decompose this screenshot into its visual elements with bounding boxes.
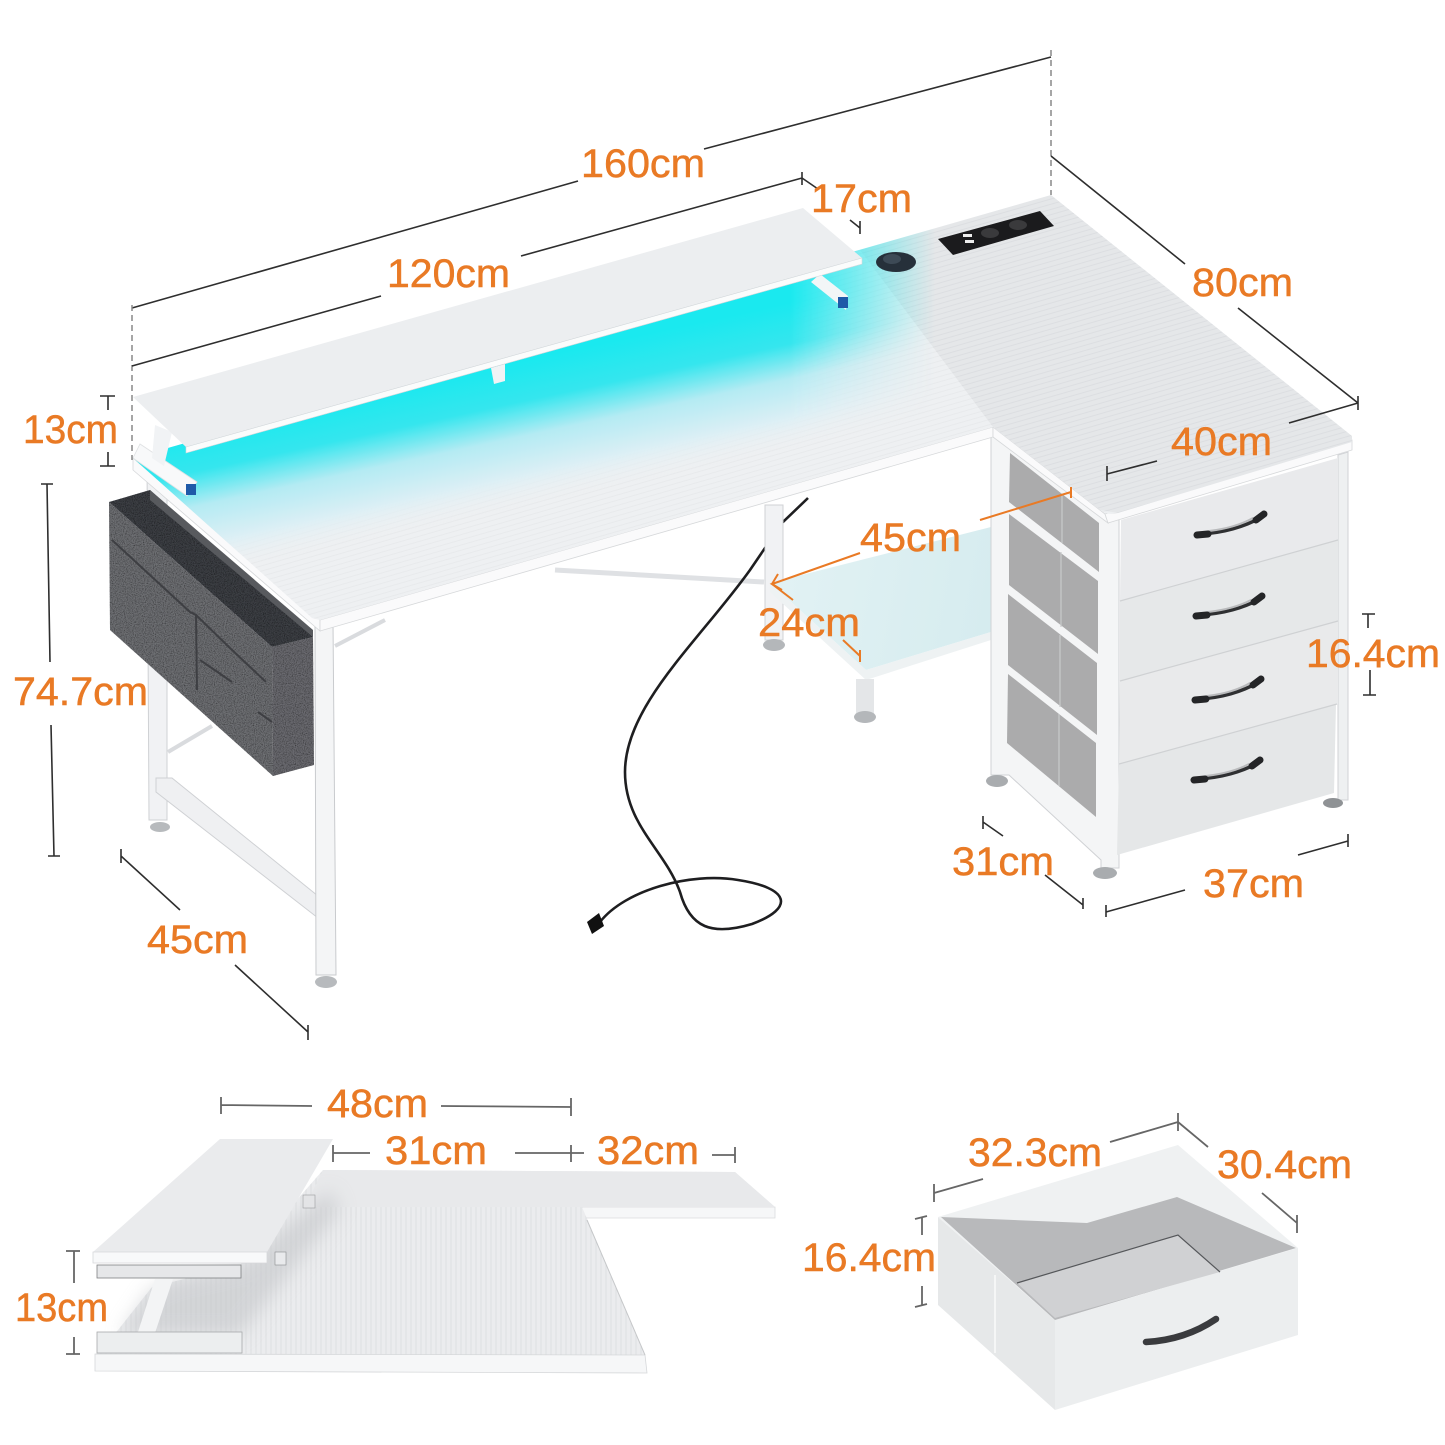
power strip: [938, 211, 1054, 255]
dimension: 31cm: 31cm: [385, 1129, 487, 1173]
dimension: 30.4cm: 30.4cm: [1217, 1143, 1352, 1187]
bag back wall: [150, 490, 313, 637]
dimension: 31cm: [333, 1129, 584, 1173]
dimension: 17cm: [802, 177, 912, 234]
dimension: 37cm cabinet width: [1106, 834, 1348, 917]
power cord with plug: [587, 498, 808, 934]
dimension: 24cm shelf depth: 24cm: [758, 601, 860, 645]
drawer fronts: [1117, 458, 1338, 855]
riser support: [97, 1195, 315, 1353]
dimension: 40cm: 40cm: [1171, 420, 1272, 464]
bag interior: [109, 490, 313, 647]
dimension: 48cm: [221, 1082, 571, 1126]
front edge: [95, 1354, 647, 1373]
inner white wall: [938, 1145, 1298, 1320]
dimension: 160cm: [132, 50, 1051, 460]
dimension: 16.4cm box height: [802, 1216, 936, 1307]
dimension: 120cm: 120cm: [387, 252, 510, 296]
dimension: 32cm: 32cm: [597, 1129, 699, 1173]
riser front edge: [186, 258, 862, 453]
desktop surface: [95, 1170, 775, 1355]
dimension: 74.7cm: 74.7cm: [13, 670, 148, 714]
dimension: 74.7cm: [13, 484, 148, 856]
dimension: 13cm riser height: 13cm: [23, 408, 118, 452]
left side: [938, 1217, 1055, 1410]
front panel: [1055, 1248, 1298, 1410]
storage bag: [109, 490, 314, 776]
desktop: [120, 190, 1360, 640]
dimension: 45cm shelf width: [772, 487, 1071, 590]
dimension: 160cm: 160cm: [581, 142, 705, 186]
riser top: [93, 1139, 333, 1252]
return edge: [582, 1207, 775, 1218]
dimension: 31cm cabinet depth: 31cm: [952, 840, 1054, 884]
inner grey wall: [941, 1197, 1296, 1320]
dimension: 16.4cm drawer height: [1306, 614, 1440, 695]
top view desktop diagram: [93, 1139, 775, 1373]
dimension: 32.3cm: 32.3cm: [968, 1131, 1102, 1175]
riser brackets: [133, 274, 848, 496]
bag side: [272, 637, 314, 776]
fabric side panels: [1007, 453, 1099, 817]
bag pockets: [112, 540, 272, 722]
drawer unit: [986, 431, 1348, 879]
dimension: 16.4cm box height: 16.4cm: [802, 1236, 936, 1280]
dimension: 80cm: 80cm: [1192, 261, 1293, 305]
lower shelf: [770, 527, 991, 723]
dimension: 13cm lower riser: [15, 1251, 108, 1354]
shadow under riser: [120, 1190, 340, 1335]
cabinet frame: [986, 431, 1348, 879]
dimension: 31cm cabinet depth: [952, 816, 1083, 909]
drawer box diagram: [938, 1145, 1298, 1410]
control knob: [876, 252, 916, 272]
drawer handles: [1194, 514, 1264, 780]
bag front: [109, 502, 273, 776]
dimension: 24cm shelf depth: [758, 584, 860, 662]
dimension: 45cm shelf width: 45cm: [860, 516, 961, 560]
dimension: 48cm: 48cm: [327, 1082, 428, 1126]
dimension: 13cm lower riser: 13cm: [15, 1286, 108, 1330]
dimension: 37cm cabinet width: 37cm: [1203, 862, 1304, 906]
dimension: 30.4cm: [1178, 1122, 1352, 1233]
drawer floor: [1017, 1235, 1220, 1318]
dimension: 13cm riser height: [23, 396, 118, 466]
monitor riser: [133, 208, 862, 496]
dimension: 32.3cm: [934, 1113, 1178, 1202]
dimension: 16.4cm drawer height: 16.4cm: [1306, 632, 1440, 676]
back leg: [763, 505, 785, 651]
left desk legs and rails: [147, 460, 764, 988]
dimension: 45cm depth: 45cm: [147, 918, 248, 962]
handle: [1146, 1319, 1216, 1342]
dimension: 45cm depth: [121, 849, 308, 1040]
dimension: 17cm: 17cm: [811, 177, 912, 221]
desktop edges: [133, 427, 1352, 631]
desk frame and legs: [147, 460, 808, 988]
riser front edge: [93, 1252, 267, 1263]
riser top: [133, 208, 862, 447]
dimension: 120cm: [132, 172, 802, 366]
main surface with LED glow: [120, 190, 1360, 640]
dimension: 40cm: [1107, 403, 1358, 481]
dimension: 80cm: [1051, 156, 1358, 410]
